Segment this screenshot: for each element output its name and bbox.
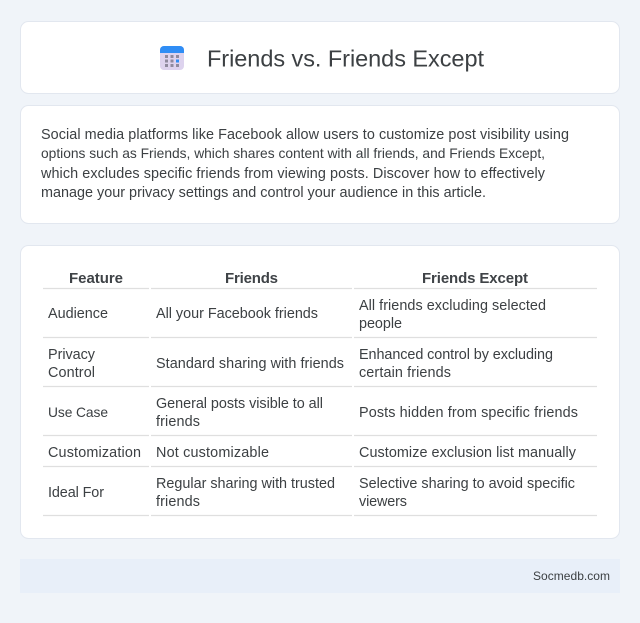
- row: Audience: people: [359, 316, 402, 332]
- row: Use Case: friends: [156, 414, 200, 430]
- panel: comparison table: [20, 246, 620, 538]
- row: Privacy Control: Privacy: [48, 347, 96, 363]
- table header: [69, 270, 528, 287]
- text block: intro: options such as Friends, which shares content with all friends, and Friends Except,: [41, 146, 545, 161]
- row: Ideal For: friends: [156, 494, 200, 510]
- panel: intro paragraph: [20, 106, 620, 224]
- row: Audience: All your Facebook friends: [156, 306, 318, 322]
- text block: intro: Social media platforms like Facebook allow users to customize post visibility using: [41, 127, 569, 143]
- title: Friends vs. Friends Except: [207, 46, 484, 72]
- row: Use Case: [48, 396, 578, 430]
- row: Ideal For: [48, 476, 575, 510]
- table header: Feature: [69, 270, 123, 287]
- table header: Friends Except: [422, 270, 528, 287]
- text block: intro: which excludes specific friends from viewing posts. Discover how to effectively: [40, 166, 546, 182]
- icon: calendar: [160, 46, 184, 70]
- panel: title card: [20, 22, 620, 94]
- text block: intro: manage your privacy settings and control your audience in this article.: [41, 185, 486, 201]
- row: Ideal For: viewers: [359, 494, 407, 510]
- row: Ideal For: Selective sharing to avoid specific: [359, 476, 575, 492]
- row: Audience: Audience: [48, 306, 108, 322]
- row: Customization: Customization: [48, 445, 141, 461]
- table header: Friends: [225, 270, 278, 287]
- row: Customization: Customize exclusion list manually: [359, 445, 577, 461]
- row: Privacy Control: Control: [48, 365, 95, 381]
- row: Audience: [48, 298, 546, 332]
- text block: intro: [40, 127, 569, 201]
- row: Ideal For: Ideal For: [48, 485, 104, 501]
- row: Privacy Control: [48, 347, 553, 381]
- row: Customization: [48, 445, 577, 461]
- footer: Socmedb.com: [533, 569, 610, 583]
- row: Ideal For: Regular sharing with trusted: [156, 476, 335, 492]
- row: Privacy Control: Standard sharing with friends: [156, 356, 344, 372]
- footer: [20, 559, 620, 593]
- row: Customization: Not customizable: [156, 445, 269, 461]
- row: Audience: All friends excluding selected: [359, 298, 546, 314]
- row: Use Case: General posts visible to all: [156, 396, 323, 412]
- row: Privacy Control: certain friends: [359, 365, 451, 381]
- row: Use Case: Use Case: [48, 405, 108, 420]
- row: Use Case: Posts hidden from specific friends: [359, 405, 578, 421]
- row: Privacy Control: Enhanced control by excluding: [359, 347, 553, 363]
